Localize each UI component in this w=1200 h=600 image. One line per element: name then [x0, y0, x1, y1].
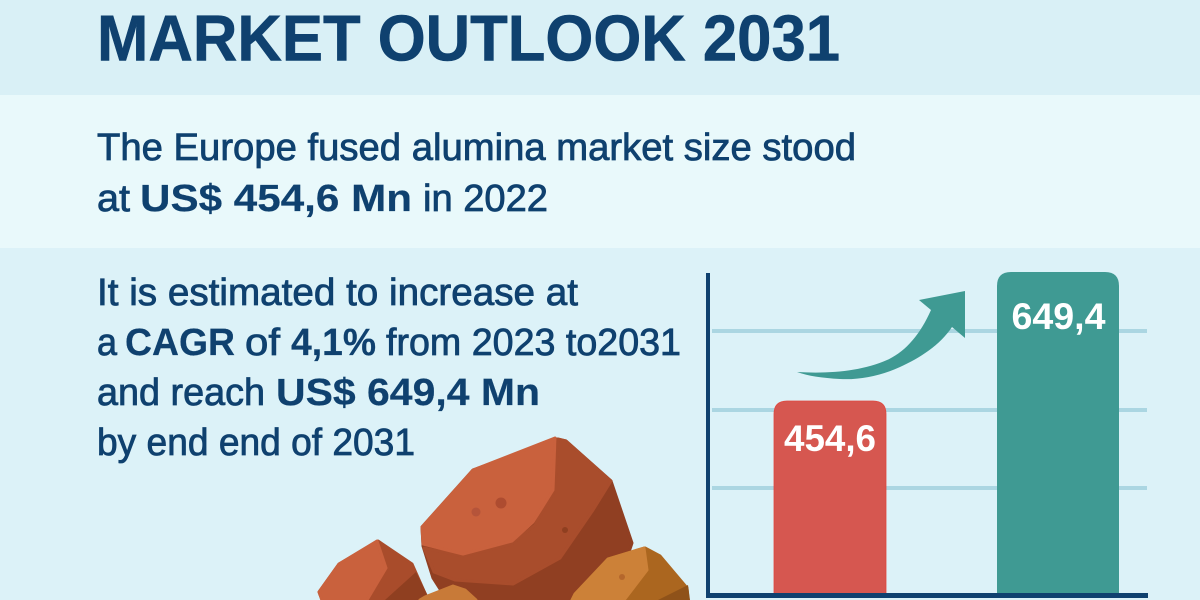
- panel: market size band: [0, 95, 1200, 248]
- gridlines: [712, 329, 1147, 490]
- text: forecast statement: CAGR: [125, 322, 235, 364]
- text: forecast statement: from 2023 to2031: [386, 322, 681, 364]
- bar: 2031 value: [997, 272, 1119, 594]
- text: forecast statement: It is estimated to increase at: [97, 272, 578, 314]
- text: forecast statement: [97, 272, 681, 464]
- text: market size statement: US$ 454,6 Mn: [140, 178, 412, 220]
- panel: title band: [0, 0, 1200, 95]
- title: MARKET OUTLOOK 2031: [97, 2, 840, 74]
- text: market size statement: The Europe fused alumina market size stood: [97, 127, 856, 169]
- arrow: growth: [797, 291, 965, 379]
- text: forecast statement: US$ 649,4 Mn: [276, 372, 540, 414]
- text: market size statement: at: [97, 178, 130, 220]
- text: market size statement: in 2022: [423, 178, 548, 220]
- bar: 2031 value: 649,4: [1012, 296, 1106, 337]
- text: forecast statement: a: [97, 322, 118, 364]
- text: market size statement: [97, 127, 856, 220]
- bar: 2022 value: 454,6: [784, 418, 876, 459]
- axes: [706, 273, 1148, 598]
- text: forecast statement: of: [245, 322, 280, 364]
- bar chart: [706, 272, 1148, 598]
- bar: 2022 value: [774, 401, 886, 594]
- rock: large: [422, 438, 632, 600]
- text: forecast statement: and reach: [97, 372, 265, 414]
- text: forecast statement: by end end of 2031: [97, 422, 415, 464]
- rock: left: [319, 541, 430, 600]
- text: forecast statement: 4,1%: [291, 322, 376, 364]
- rock: small center: [420, 586, 476, 600]
- rock: right: [572, 548, 690, 600]
- icon: fused alumina rocks: [319, 438, 690, 600]
